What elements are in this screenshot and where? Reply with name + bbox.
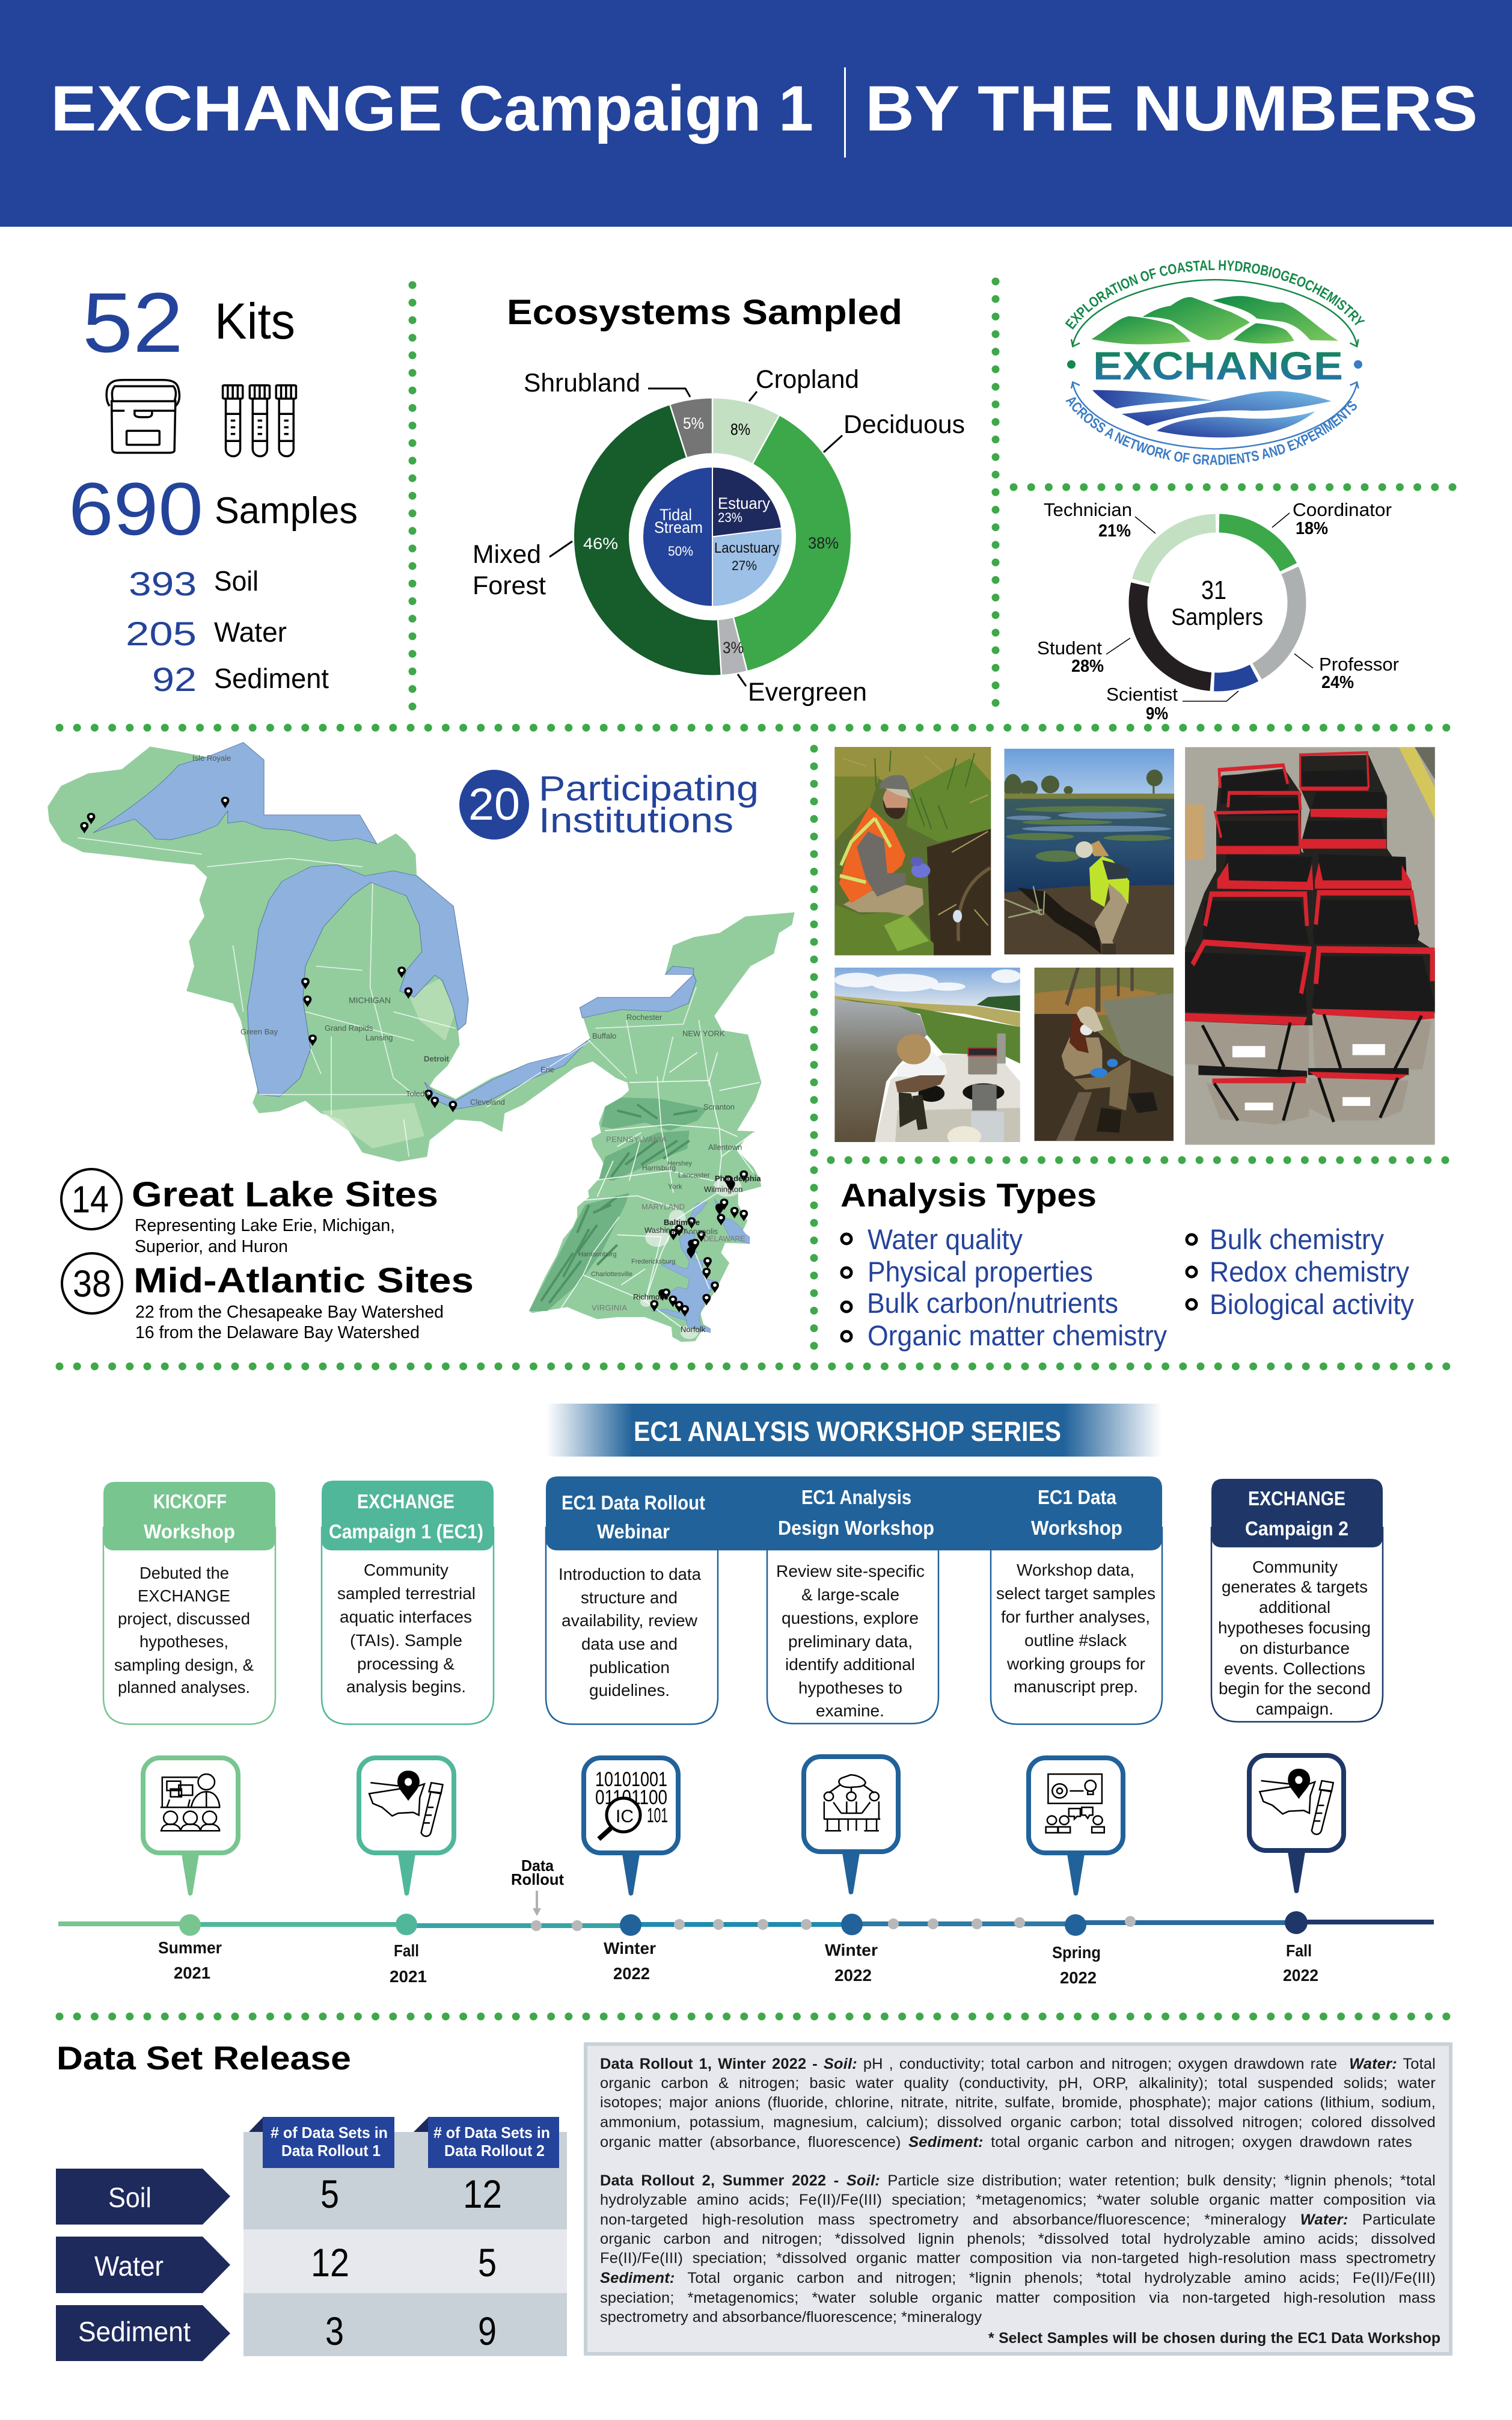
card: EXCHANGE Campaign 2: begin for the second bbox=[1219, 1679, 1371, 1698]
card: EC1 Analysis Design Workshop: examine. bbox=[816, 1701, 884, 1720]
callout: 38 Mid-Atlantic Sites bbox=[62, 1253, 474, 1342]
map place names: Washington bbox=[644, 1226, 685, 1235]
map place names: Detroit bbox=[424, 1054, 450, 1063]
icon: cooler bbox=[106, 380, 179, 453]
card: EC1 Data Workshop: outline #slack bbox=[1024, 1631, 1127, 1650]
card: Kickoff Workshop: Debuted the bbox=[139, 1564, 229, 1582]
title divider bbox=[844, 67, 846, 158]
card: EC1 Data Workshop: working groups for bbox=[1006, 1654, 1145, 1673]
card: EXCHANGE Campaign 1: sampled terrestrial bbox=[337, 1584, 476, 1603]
photo: researcher on boat bbox=[834, 968, 1021, 1147]
map place names: Grand Rapids bbox=[325, 1024, 373, 1033]
map place names: York bbox=[668, 1182, 683, 1191]
card: Kickoff Workshop: EXCHANGE bbox=[138, 1586, 230, 1605]
ring labels and leaders: Coordinator bbox=[1293, 499, 1392, 520]
card: EC1 Data Rollout Webinar: publication bbox=[589, 1658, 670, 1677]
ring labels and leaders: Scientist bbox=[1106, 684, 1178, 705]
table: data sets per rollout: 5 bbox=[478, 2240, 497, 2285]
ring labels and leaders: 9% bbox=[1146, 704, 1168, 723]
card: EXCHANGE Campaign 2: generates & targets bbox=[1222, 1577, 1368, 1596]
callout: 20 participating institutions: Institutions bbox=[539, 801, 733, 840]
ring centre label bbox=[1171, 576, 1263, 630]
icon pin: campaign 1 map and sample tube bbox=[359, 1758, 454, 1896]
icon pin: kickoff presentation bbox=[143, 1758, 238, 1896]
donut labels and leader lines: 50% bbox=[668, 544, 693, 559]
callout: 38 Mid-Atlantic Sites: 38 bbox=[73, 1263, 111, 1305]
card: EC1 Analysis Design Workshop: Review site-specific bbox=[776, 1562, 925, 1580]
map place names: PENNSYLVANIA bbox=[606, 1135, 667, 1144]
map place names: Wilmington bbox=[704, 1185, 742, 1194]
table: data sets per rollout: 5 bbox=[320, 2172, 339, 2216]
title: EXCHANGE Campaign 1 bbox=[51, 72, 813, 144]
stat: 205 Water: 205 bbox=[126, 615, 197, 653]
ring centre label: Samplers bbox=[1171, 604, 1263, 630]
card: EC1 Data Rollout Webinar: data use and bbox=[581, 1635, 678, 1653]
data rollout label and arrow bbox=[511, 1856, 564, 1916]
stat: 393 Soil bbox=[129, 565, 259, 603]
text block: data rollout details: spectrometry and absorbance/fluorescence; *mineralogy bbox=[600, 2309, 982, 2326]
text block: data rollout details: Sediment: Total organic carbon and nitrogen; *lignin phenols; *total hydrolyzable amino acids; Fe(II)/Fe(III) bbox=[600, 2270, 1436, 2286]
timeline date labels: Winter bbox=[825, 1941, 878, 1959]
text block: data rollout details: ammonium, potassium, magnesium, calcium); dissolved organic carbon; total dissolved nitrogen; colored dissolved bbox=[600, 2114, 1436, 2131]
ring centre label: 31 bbox=[1201, 576, 1226, 605]
banner: EC1 analysis workshop series: EC1 ANALYSIS WORKSHOP SERIES bbox=[634, 1416, 1061, 1447]
card: EC1 Data Rollout Webinar: Introduction to data bbox=[559, 1565, 701, 1583]
timeline date labels: 2022 bbox=[1060, 1968, 1097, 1987]
ring labels and leaders: Technician bbox=[1044, 499, 1132, 520]
card: EC1 Data Rollout Webinar: availability, review bbox=[562, 1611, 698, 1630]
card: EXCHANGE Campaign 2: events. Collections bbox=[1224, 1659, 1365, 1678]
table: data sets per rollout: Data Rollout 2 bbox=[444, 2142, 545, 2160]
map place names: Fredericksburg bbox=[631, 1258, 675, 1265]
row label: Sediment bbox=[56, 2305, 230, 2361]
donut labels and leader lines: Tidal bbox=[660, 506, 692, 524]
card: EXCHANGE Campaign 2: Campaign 2 bbox=[1245, 1517, 1348, 1540]
callout: 38 Mid-Atlantic Sites: Mid-Atlantic Sites bbox=[133, 1261, 474, 1300]
panel: data set release bbox=[56, 2039, 1451, 2361]
donut labels and leader lines: Cropland bbox=[756, 365, 859, 394]
map place names: Charlottesville bbox=[591, 1271, 632, 1278]
analysis list: Water quality bbox=[868, 1223, 1023, 1255]
timeline date labels: Summer bbox=[158, 1938, 222, 1957]
card: EXCHANGE Campaign 1: processing & bbox=[357, 1654, 455, 1673]
callout: 14 Great Lake Sites bbox=[61, 1169, 438, 1256]
text block: data rollout details: organic matter (absorbance, fluorescence) Sediment: total organic carbon and nitrogen; oxygen drawdown rates bbox=[600, 2134, 1412, 2151]
card: EC1 Data Rollout Webinar: structure and bbox=[581, 1588, 678, 1607]
analysis list: Bulk carbon/nutrients bbox=[867, 1287, 1118, 1319]
panel: analysis types bbox=[840, 1176, 1414, 1351]
photo: researcher in orange vest bbox=[834, 747, 991, 955]
callout: 20 participating institutions: Participating bbox=[539, 769, 759, 808]
heading: Analysis Types: Analysis Types bbox=[840, 1176, 1097, 1214]
header banner bbox=[0, 0, 1512, 227]
map place names: Erie bbox=[540, 1065, 554, 1074]
donut labels and leader lines: Estuary bbox=[718, 494, 770, 512]
card group: EC1 analysis workshops bbox=[546, 1476, 1162, 1724]
card: EC1 Data Rollout Webinar: EC1 Data Rollout bbox=[562, 1491, 705, 1514]
row label: Water: Water bbox=[94, 2250, 164, 2282]
icon pin: data rollout binary and magnifier: 01101100 bbox=[595, 1786, 667, 1809]
stat: 92 Sediment bbox=[152, 660, 329, 698]
icon pin: data rollout binary and magnifier: 10101001 bbox=[595, 1768, 667, 1791]
ring labels and leaders: 21% bbox=[1098, 521, 1131, 541]
card: EC1 Analysis Design Workshop: & large-scale bbox=[801, 1585, 899, 1604]
table: data sets per rollout: # of Data Sets in bbox=[271, 2124, 388, 2142]
map place names: Philadelphia bbox=[715, 1174, 761, 1183]
title: BY THE NUMBERS: BY THE NUMBERS bbox=[865, 72, 1478, 144]
card: EXCHANGE Campaign 1: Campaign 1 (EC1) bbox=[329, 1520, 483, 1543]
title: EXCHANGE Campaign 1: Campaign 1 bbox=[459, 72, 813, 144]
card: EXCHANGE Campaign 1 bbox=[322, 1481, 494, 1724]
stat: 393 Soil: Soil bbox=[214, 565, 259, 597]
map place names: MARYLAND bbox=[641, 1202, 685, 1211]
donut labels and leader lines: Evergreen bbox=[748, 678, 867, 707]
map pins bbox=[80, 797, 748, 1316]
row label: Water bbox=[56, 2237, 230, 2293]
donut labels and leader lines: 38% bbox=[808, 534, 839, 552]
card: EC1 Data Rollout Webinar: guidelines. bbox=[589, 1681, 670, 1700]
stat: 92 Sediment: Sediment bbox=[214, 663, 329, 694]
map place names: Green Bay bbox=[240, 1027, 278, 1036]
bullet markers bbox=[842, 1234, 1196, 1341]
timeline bbox=[58, 1856, 1434, 1987]
map place names: Isle Royale bbox=[192, 754, 231, 763]
map place names: VIRGINIA bbox=[592, 1303, 627, 1312]
photo: researcher at wetland bbox=[1004, 749, 1174, 954]
timeline date labels bbox=[158, 1938, 1318, 1987]
timeline date labels: Spring bbox=[1052, 1943, 1101, 1962]
callout: 14 Great Lake Sites: Great Lake Sites bbox=[132, 1175, 438, 1214]
map place names: Norfolk bbox=[681, 1325, 706, 1334]
card: EC1 Data Rollout Webinar: Webinar bbox=[597, 1520, 670, 1543]
stat: 205 Water bbox=[126, 615, 287, 653]
text block: data rollout details: hydrolyzable amino acids; Fe(II)/Fe(III) speciation; *metagenomics; *water soluble organic matter composition via bbox=[600, 2191, 1436, 2208]
callout: 14 Great Lake Sites: Superior, and Huron bbox=[135, 1237, 288, 1256]
card: EXCHANGE Campaign 2: Community bbox=[1252, 1558, 1338, 1576]
donut labels and leader lines: 23% bbox=[718, 510, 742, 525]
analysis list: Biological activity bbox=[1210, 1288, 1414, 1320]
card: Kickoff Workshop: KICKOFF bbox=[153, 1490, 227, 1512]
card: EC1 Data Workshop: manuscript prep. bbox=[1014, 1677, 1138, 1696]
map place names: Annapolis bbox=[684, 1227, 718, 1236]
number: 52: 52 bbox=[82, 275, 183, 370]
card: EC1 Data Workshop: for further analyses, bbox=[1001, 1608, 1150, 1626]
map light farmland patches bbox=[321, 978, 456, 1149]
card: EC1 Data Workshop: EC1 Data bbox=[1038, 1486, 1117, 1508]
text block: data rollout details: Data Rollout 2, Summer 2022 - Soil: Particle size distribution; water retention; bulk density; *lignin phenols; *total bbox=[600, 2172, 1436, 2189]
ring labels and leaders: 28% bbox=[1071, 657, 1104, 676]
card: EXCHANGE Campaign 1: Community bbox=[364, 1561, 448, 1579]
icon pin: campaign 2 map and sample tube bbox=[1249, 1755, 1344, 1893]
logo: EXCHANGE: ACROSS A NETWORK OF GRADIENTS AND EXPERIMENTS bbox=[1062, 393, 1361, 468]
timeline date labels: Fall bbox=[1286, 1941, 1312, 1960]
ring labels and leaders: Professor bbox=[1319, 654, 1399, 675]
map land bbox=[47, 742, 795, 1342]
callout: 14 Great Lake Sites: Representing Lake Erie, Michigan, bbox=[135, 1216, 395, 1235]
icon pin: data rollout binary and magnifier: 101 bbox=[647, 1804, 668, 1827]
donut labels and leader lines: 3% bbox=[723, 639, 744, 657]
text block: data rollout details: isotopes; major anions (fluoride, chlorine, nitrate, nitrite, sulfate, bromide, phosphate); major cations (lithium, sodium, bbox=[600, 2094, 1436, 2111]
map place names: Cleveland bbox=[470, 1098, 505, 1107]
card: Kickoff Workshop: project, discussed bbox=[118, 1609, 250, 1628]
analysis list: Bulk chemistry bbox=[1210, 1223, 1384, 1255]
donut labels and leader lines: Stream bbox=[654, 518, 703, 536]
timeline date labels: Fall bbox=[394, 1941, 419, 1960]
photo grid bbox=[834, 747, 1174, 1147]
analysis list bbox=[867, 1223, 1414, 1351]
bays bbox=[651, 1199, 750, 1333]
timeline date labels: 2021 bbox=[174, 1964, 210, 1982]
urban areas bbox=[640, 1177, 741, 1339]
text block: data rollout details: non-targeted high-resolution mass spectrometry and absorbance/fluorescence; *mineralogy Water: Particulate bbox=[600, 2211, 1436, 2228]
roads bbox=[559, 1052, 759, 1333]
map place names: Hershey bbox=[667, 1160, 692, 1167]
card: EC1 Analysis Design Workshop: Design Workshop bbox=[778, 1517, 934, 1539]
panel: ecosystems sampled bbox=[473, 293, 965, 707]
donut labels and leader lines: Lacustuary bbox=[714, 540, 779, 556]
text block: data rollout details: Fe(II)/Fe(III) speciation; *dissolved organic matter composition via non-targeted high-resolution mass spectrometry bbox=[600, 2250, 1436, 2267]
ring labels and leaders: Student bbox=[1037, 637, 1102, 659]
stat: 393 Soil: 393 bbox=[129, 565, 197, 603]
callout: 20 participating institutions bbox=[459, 769, 759, 840]
card: EC1 Analysis Design Workshop: questions, explore bbox=[782, 1609, 919, 1627]
row label: Soil bbox=[56, 2169, 230, 2225]
card: EXCHANGE Campaign 1: EXCHANGE bbox=[357, 1490, 455, 1512]
card: EC1 Data Workshop: Workshop bbox=[1031, 1517, 1122, 1539]
card: EC1 Analysis Design Workshop: hypotheses to bbox=[798, 1678, 902, 1697]
panel: samplers donut bbox=[1037, 499, 1399, 723]
card: EXCHANGE Campaign 1: (TAIs). Sample bbox=[350, 1631, 462, 1650]
photo: stacked coolers bbox=[1185, 747, 1435, 1145]
heading: Ecosystems Sampled: Ecosystems Sampled bbox=[507, 293, 902, 332]
icon pin: data rollout binary and magnifier: IC bbox=[616, 1807, 634, 1826]
callout: 38 Mid-Atlantic Sites: 16 from the Delaware Bay Watershed bbox=[135, 1323, 420, 1342]
donut labels and leader lines: Forest bbox=[473, 571, 546, 600]
analysis list: Physical properties bbox=[868, 1256, 1093, 1288]
card: Kickoff Workshop bbox=[103, 1482, 275, 1724]
stat: 92 Sediment: 92 bbox=[152, 660, 197, 698]
card: EXCHANGE Campaign 2: EXCHANGE bbox=[1248, 1487, 1345, 1509]
ring labels and leaders: 24% bbox=[1321, 673, 1354, 692]
card: EXCHANGE Campaign 1: aquatic interfaces bbox=[340, 1608, 472, 1626]
map place names: Rochester bbox=[626, 1013, 663, 1022]
card: EC1 Data Workshop bbox=[996, 1486, 1155, 1696]
text block: data rollout details: Data Rollout 1, Winter 2022 - Soil: pH , conductivity; total carbon and nitrogen; oxygen drawdown rate Water: Total bbox=[600, 2056, 1436, 2072]
map place names: NEW YORK bbox=[682, 1029, 725, 1038]
card: EXCHANGE Campaign 2: campaign. bbox=[1256, 1700, 1333, 1718]
logo: EXCHANGE: EXPLORATION OF COASTAL HYDROBIOGEOCHEMISTRY bbox=[1065, 260, 1365, 330]
card: EC1 Data Workshop: select target samples bbox=[996, 1584, 1155, 1603]
table: data sets per rollout bbox=[243, 2117, 567, 2356]
timeline date labels: 2022 bbox=[613, 1964, 650, 1983]
donut labels and leader lines: 46% bbox=[583, 535, 618, 553]
card: EXCHANGE Campaign 2: hypotheses focusing bbox=[1218, 1618, 1371, 1637]
donut labels and leader lines: 27% bbox=[732, 558, 757, 573]
map place names: Richmond bbox=[633, 1292, 669, 1301]
row label: Soil: Soil bbox=[108, 2182, 152, 2213]
map place names: Lansing bbox=[366, 1033, 393, 1042]
map: Great Lakes and Mid-Atlantic sites bbox=[47, 742, 795, 1342]
map place names: Harrisburg bbox=[642, 1164, 676, 1172]
data rollout label and arrow: Data bbox=[521, 1856, 554, 1875]
analysis list: Redox chemistry bbox=[1210, 1256, 1409, 1288]
callout: 38 Mid-Atlantic Sites: 22 from the Chesapeake Bay Watershed bbox=[135, 1303, 444, 1322]
card: EC1 Analysis Design Workshop: preliminary data, bbox=[788, 1632, 913, 1651]
back left coolers bbox=[1220, 772, 1289, 805]
logo: EXCHANGE bbox=[1062, 257, 1367, 468]
map: Mid-Atlantic detail bbox=[529, 1052, 759, 1339]
donut labels and leader lines: 8% bbox=[730, 420, 750, 438]
number: 690: 690 bbox=[69, 468, 203, 551]
icon pin: data workshop board bbox=[1029, 1758, 1123, 1896]
map place names: Allentown bbox=[708, 1143, 742, 1152]
table: data sets per rollout: 9 bbox=[478, 2309, 497, 2353]
card: Kickoff Workshop: planned analyses. bbox=[118, 1678, 250, 1697]
panel background: data rollout details bbox=[586, 2044, 1451, 2354]
donut labels and leader lines bbox=[473, 365, 965, 707]
label: Samples: Samples bbox=[215, 490, 358, 532]
data rollout label and arrow: Rollout bbox=[511, 1870, 564, 1888]
icon: sample tubes bbox=[223, 385, 296, 456]
chart: 31 samplers ring bbox=[1138, 523, 1297, 682]
card: Kickoff Workshop: Workshop bbox=[144, 1520, 235, 1543]
timeline date labels: 2021 bbox=[390, 1967, 427, 1986]
text block: data rollout details: speciation; *metagenomics; *water soluble organic matter composition via non-targeted high-resolution mass bbox=[600, 2289, 1436, 2306]
logo: EXCHANGE: EXCHANGE bbox=[1093, 343, 1343, 388]
ring labels and leaders bbox=[1037, 499, 1399, 723]
card: EXCHANGE Campaign 1: analysis begins. bbox=[346, 1677, 466, 1696]
table: data sets per rollout: 12 bbox=[463, 2172, 502, 2216]
donut labels and leader lines: Shrubland bbox=[524, 369, 640, 398]
icon pin: design workshop team bbox=[804, 1757, 898, 1894]
map place names: Scranton bbox=[703, 1102, 735, 1111]
back right coolers bbox=[1302, 770, 1367, 789]
map place names: Lancaster bbox=[678, 1171, 710, 1179]
donut labels and leader lines: 5% bbox=[683, 414, 704, 432]
text block: data rollout details: organic carbon and nitrogen; *dissolved lignin phenols; *dissolved total hydrolyzable amino acids; dissolved bbox=[600, 2231, 1436, 2247]
map place names: Harrisonburg bbox=[578, 1251, 617, 1258]
callout: 20 participating institutions: 20 bbox=[468, 779, 520, 829]
map place names: Baltimore bbox=[664, 1218, 700, 1227]
table: data sets per rollout: 3 bbox=[325, 2309, 344, 2353]
callout: 14 Great Lake Sites: 14 bbox=[72, 1179, 109, 1221]
card: EC1 Analysis Design Workshop bbox=[776, 1486, 934, 1720]
text block: data rollout details bbox=[600, 2054, 1436, 2349]
donut labels and leader lines: Mixed bbox=[473, 540, 541, 569]
cooler stack backing bbox=[1185, 769, 1313, 1025]
table: data sets per rollout: Data Rollout 1 bbox=[281, 2142, 381, 2160]
icon pin: data rollout binary and magnifier bbox=[584, 1758, 678, 1896]
card: EC1 Data Rollout Webinar bbox=[559, 1491, 705, 1700]
map place names: DELAWARE bbox=[703, 1234, 745, 1243]
row label: Sediment: Sediment bbox=[78, 2316, 191, 2347]
title: EXCHANGE Campaign 1: EXCHANGE bbox=[51, 72, 442, 144]
panel: kits and samples stats bbox=[69, 275, 358, 698]
map lakes bbox=[93, 742, 696, 1109]
timeline date labels: Winter bbox=[604, 1939, 656, 1958]
card: Kickoff Workshop: sampling design, & bbox=[114, 1656, 254, 1674]
card: EC1 Data Workshop: Workshop data, bbox=[1017, 1561, 1134, 1579]
relief bbox=[529, 1098, 708, 1311]
card: EXCHANGE Campaign 2: on disturbance bbox=[1240, 1639, 1350, 1657]
card: Kickoff Workshop: hypotheses, bbox=[139, 1632, 228, 1651]
timeline date labels: 2022 bbox=[1283, 1966, 1318, 1985]
timeline date labels: 2022 bbox=[834, 1966, 872, 1985]
card: EC1 Analysis Design Workshop: identify additional bbox=[785, 1655, 915, 1674]
text block: data rollout details: * Select Samples will be chosen during the EC1 Data Workshop bbox=[988, 2330, 1440, 2347]
photo: researcher on mudflat bbox=[1035, 968, 1174, 1141]
card: EXCHANGE Campaign 2: additional bbox=[1259, 1598, 1330, 1617]
chart: ecosystem donut bbox=[601, 397, 824, 676]
map place names: Buffalo bbox=[592, 1031, 616, 1040]
map place names: Toledo bbox=[406, 1089, 429, 1098]
map roads bbox=[78, 838, 709, 1156]
card: EXCHANGE Campaign 2 bbox=[1211, 1479, 1383, 1722]
ring labels and leaders: 18% bbox=[1296, 519, 1328, 538]
analysis list: Organic matter chemistry bbox=[868, 1319, 1167, 1351]
card: EC1 Analysis Design Workshop: EC1 Analysis bbox=[801, 1486, 911, 1508]
table: data sets per rollout: 12 bbox=[311, 2240, 349, 2285]
text block: data rollout details: organic carbon & nitrogen; basic water quality (conductivity, pH, ORP, alkalinity); total suspended solids; water bbox=[600, 2075, 1436, 2092]
map place names: MICHIGAN bbox=[349, 995, 391, 1005]
map place names bbox=[192, 754, 761, 1334]
heading: Data Set Release: Data Set Release bbox=[57, 2039, 351, 2077]
stat: 205 Water: Water bbox=[214, 616, 287, 648]
table: data sets per rollout: # of Data Sets in bbox=[433, 2124, 550, 2142]
donut labels and leader lines: Deciduous bbox=[843, 410, 965, 439]
label: Kits: Kits bbox=[215, 293, 295, 349]
banner: EC1 analysis workshop series bbox=[546, 1404, 1162, 1457]
